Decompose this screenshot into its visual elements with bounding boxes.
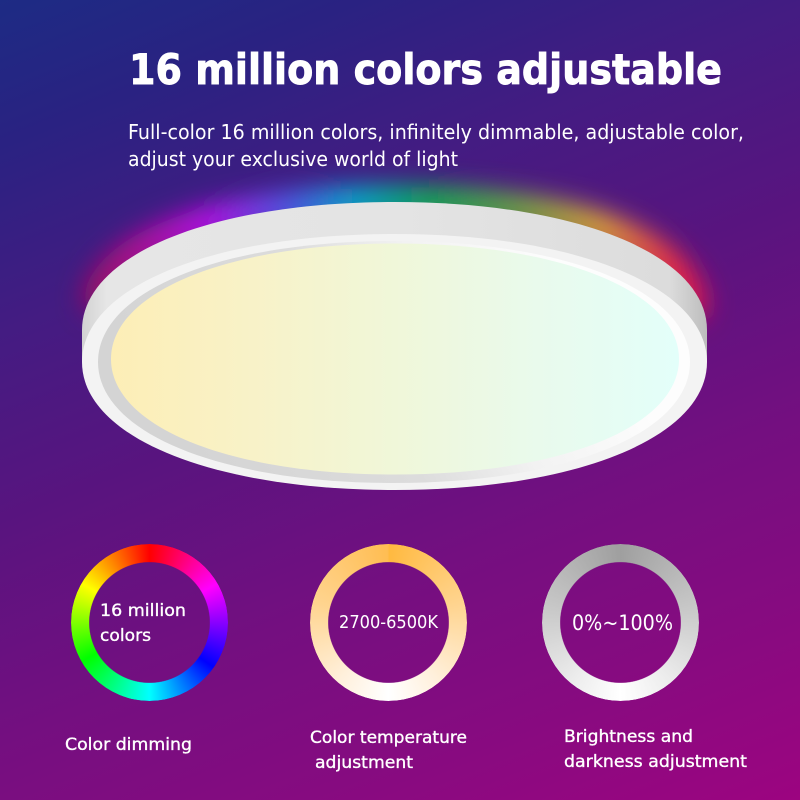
lamp body	[82, 202, 707, 490]
label: color temperature adjustment	[310, 728, 467, 773]
lamp side wall	[82, 202, 707, 362]
label: brightness and darkness adjustment: Brightness and	[564, 727, 693, 747]
subtitle	[128, 120, 744, 171]
ring text: 16 million colors: 16 million	[100, 601, 186, 621]
label: color dimming: Color dimming	[65, 735, 192, 755]
label: brightness and darkness adjustment	[564, 727, 747, 772]
label: brightness and darkness adjustment: darkness adjustment	[564, 752, 747, 772]
lit panel	[111, 244, 679, 474]
ring: brightness	[542, 544, 699, 701]
subtitle line 1: Full-color 16 million colors, infinitely dimmable, adjustable color,	[128, 120, 744, 144]
ring text: 16 million colors	[100, 601, 186, 646]
title: 16 million colors adjustable	[129, 45, 722, 94]
label: color temperature adjustment: adjustment	[315, 753, 413, 773]
lamp inner rim	[98, 241, 690, 483]
label: color temperature adjustment: Color temperature	[310, 728, 467, 748]
subtitle line 2: adjust your exclusive world of light	[128, 147, 458, 171]
ring text: 16 million colors: colors	[100, 626, 151, 646]
lamp front rim	[82, 234, 707, 490]
ring: RGB color wheel	[71, 544, 228, 701]
ring: color temperature	[310, 544, 467, 701]
ring text: 2700-6500K: 2700-6500K	[339, 612, 439, 633]
ring text: 0%~100%: 0%~100%	[572, 611, 673, 635]
rainbow glow behind lamp	[98, 202, 692, 305]
